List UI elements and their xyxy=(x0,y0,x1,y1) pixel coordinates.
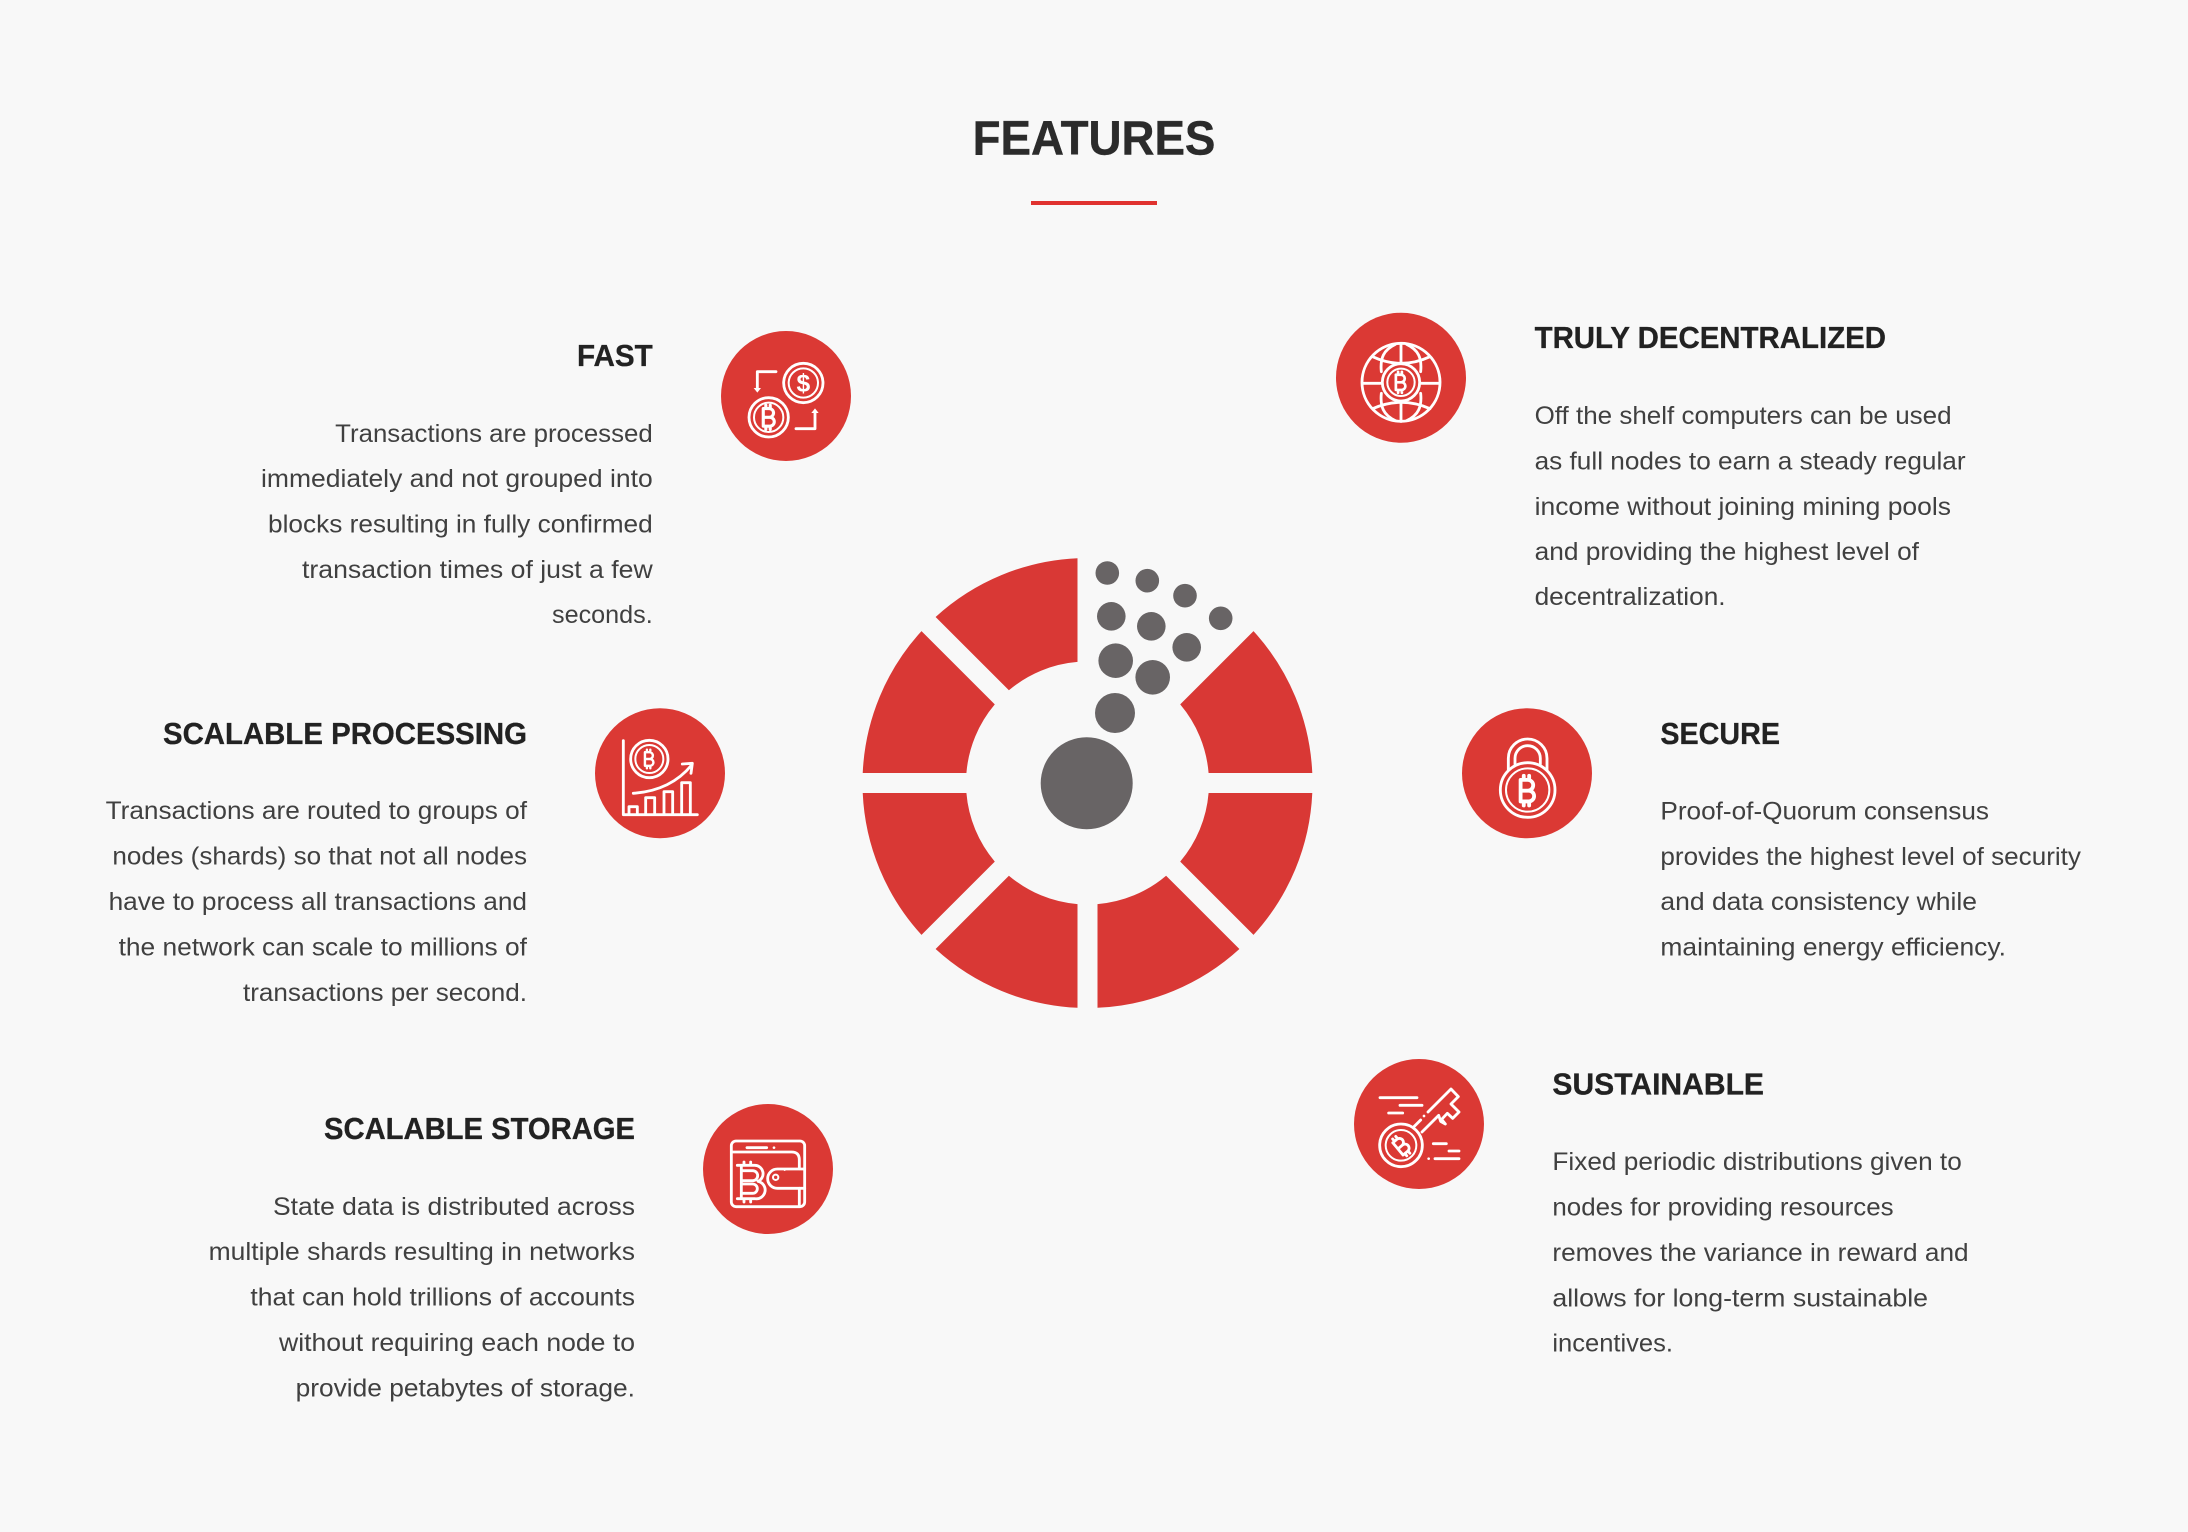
text block: secure: Proof-of-Quorum consensus xyxy=(1660,798,1989,826)
icon: bitcoin wallet xyxy=(703,1104,833,1234)
text block: fast: blocks resulting in fully confirmed xyxy=(268,511,653,539)
text block: scalable processing: have to process all transactions and xyxy=(109,888,527,916)
text block: fast: Transactions are processed xyxy=(335,420,653,448)
text block: truly decentralized: and providing the highest level of xyxy=(1535,538,1919,566)
text block: sustainable: Fixed periodic distributions given to xyxy=(1552,1148,1962,1176)
icon: bitcoin padlock xyxy=(1462,708,1592,838)
icon: growth chart xyxy=(595,708,725,838)
text block: scalable storage: provide petabytes of storage. xyxy=(296,1375,635,1403)
panel: fast xyxy=(261,331,851,629)
text block: sustainable: removes the variance in reward and xyxy=(1552,1239,1969,1267)
heading: fast: FAST xyxy=(577,338,653,373)
text block: truly decentralized: decentralization. xyxy=(1535,583,1726,611)
text block: scalable processing: transactions per second. xyxy=(243,979,527,1007)
text block: secure xyxy=(1660,798,2082,962)
text block: scalable processing: nodes (shards) so that not all nodes xyxy=(112,842,527,870)
text block: fast: transaction times of just a few xyxy=(302,556,654,584)
text block: scalable processing: Transactions are routed to groups of xyxy=(106,797,527,825)
heading: scalable storage: SCALABLE STORAGE xyxy=(324,1111,635,1146)
text block: scalable processing: the network can scale to millions of xyxy=(119,934,527,962)
text block: fast: immediately and not grouped into xyxy=(261,465,653,493)
text block: truly decentralized xyxy=(1535,402,1966,611)
ring segments xyxy=(863,558,1312,1008)
panel: secure xyxy=(1462,708,2082,962)
heading: sustainable: SUSTAINABLE xyxy=(1552,1066,1764,1101)
text block: scalable processing xyxy=(106,797,527,1007)
panel: scalable storage xyxy=(209,1104,833,1403)
text block: truly decentralized: as full nodes to earn a steady regular xyxy=(1535,447,1966,475)
text block: scalable storage: that can hold trillions of accounts xyxy=(250,1284,635,1312)
text block: fast xyxy=(261,420,654,629)
text block: secure: and data consistency while xyxy=(1660,888,1977,916)
text block: scalable storage xyxy=(209,1193,635,1403)
text block: sustainable: incentives. xyxy=(1552,1329,1673,1357)
title underline xyxy=(1031,201,1157,205)
scattered dots xyxy=(1041,561,1232,829)
heading: secure: SECURE xyxy=(1660,716,1780,751)
text block: secure: provides the highest level of security xyxy=(1660,843,2082,871)
donut chart xyxy=(863,558,1312,1008)
heading: truly decentralized: TRULY DECENTRALIZED xyxy=(1535,320,1886,355)
text block: scalable storage: multiple shards resulting in networks xyxy=(209,1238,635,1266)
title: FEATURES xyxy=(973,112,1215,166)
text block: sustainable: nodes for providing resources xyxy=(1552,1194,1894,1222)
text block: fast: seconds. xyxy=(552,601,653,629)
panel: sustainable xyxy=(1354,1059,1969,1357)
text block: truly decentralized: income without joining mining pools xyxy=(1535,493,1951,521)
text block: scalable storage: State data is distributed across xyxy=(273,1193,635,1221)
icon: currency exchange xyxy=(721,331,851,461)
text block: sustainable: allows for long-term sustainable xyxy=(1552,1284,1928,1312)
panel: scalable processing xyxy=(106,708,725,1007)
icon: bitcoin key xyxy=(1354,1059,1484,1189)
text block: truly decentralized: Off the shelf computers can be used xyxy=(1535,402,1952,430)
heading: scalable processing: SCALABLE PROCESSING xyxy=(163,716,527,751)
text block: sustainable xyxy=(1552,1148,1969,1357)
icon: currency exchange: $ xyxy=(796,371,810,398)
panel: truly decentralized xyxy=(1336,313,1966,611)
text block: scalable storage: without requiring each node to xyxy=(278,1329,635,1357)
text block: secure: maintaining energy efficiency. xyxy=(1660,934,2006,962)
icon: bitcoin globe xyxy=(1336,313,1466,443)
